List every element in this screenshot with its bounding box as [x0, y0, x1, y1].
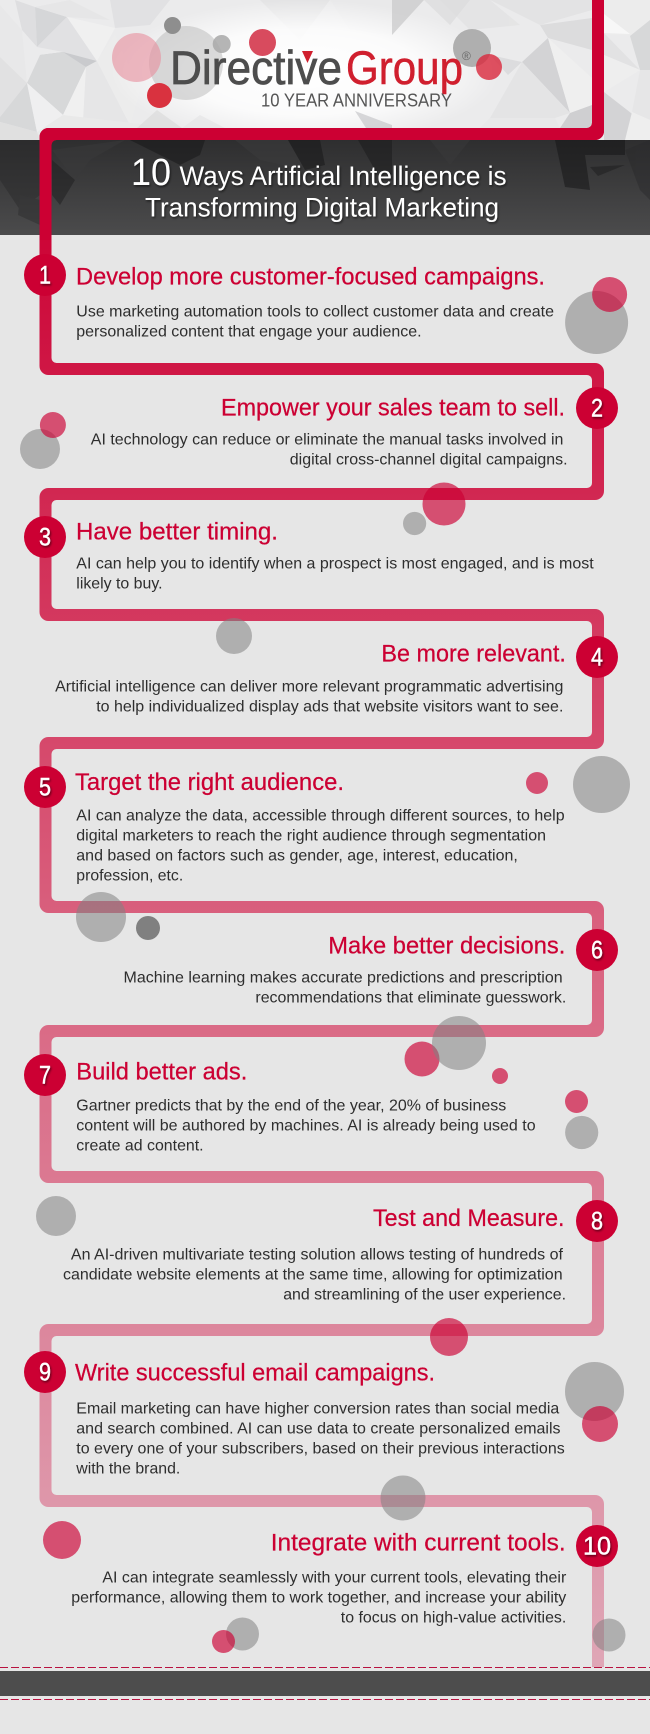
badge 7 — [24, 1054, 66, 1096]
main title: Transforming Digital Marketing — [145, 193, 499, 223]
badge 1 — [24, 254, 66, 296]
heading 1: Develop more customer-focused campaigns. — [76, 263, 545, 290]
heading 8: Test and Measure. — [373, 1205, 564, 1232]
body 6: Machine learning makes accurate predictions and prescription — [124, 970, 563, 987]
logo wordmark — [170, 41, 471, 94]
body 5: profession, etc. — [76, 868, 183, 885]
step 9 — [24, 1351, 565, 1478]
logo wordmark: Group — [346, 41, 463, 94]
body 7: content will be authored by machines. AI is already being used to — [76, 1118, 536, 1135]
body 8 — [63, 1247, 566, 1304]
logo wordmark: Directive — [170, 41, 342, 94]
step 10 — [71, 1525, 618, 1627]
body 9: Email marketing can have higher conversion rates than social media — [76, 1401, 559, 1418]
body 10: performance, allowing them to work together, and increase your ability — [71, 1590, 566, 1607]
badge 5 — [24, 766, 66, 808]
body 1: Use marketing automation tools to collect customer data and create — [76, 304, 554, 321]
body 8: candidate website elements at the same time, allowing for optimization — [63, 1267, 563, 1284]
body 10 — [71, 1570, 567, 1627]
badge 3 — [24, 516, 66, 558]
body 6: recommendations that eliminate guesswork. — [255, 990, 566, 1007]
step 7 — [24, 1054, 536, 1155]
body 3: likely to buy. — [76, 576, 162, 593]
heading 10: Integrate with current tools. — [271, 1530, 566, 1557]
step 5 — [24, 766, 565, 885]
body 5: and based on factors such as gender, age, interest, education, — [76, 848, 518, 865]
badge 5: 5 — [39, 774, 51, 802]
body 10: AI can integrate seamlessly with your current tools, elevating their — [102, 1570, 567, 1587]
badge 3: 3 — [39, 524, 51, 552]
logo wordmark: ® — [462, 49, 471, 63]
body 9 — [75, 1401, 565, 1478]
body 6 — [124, 970, 566, 1007]
badge 2 — [576, 387, 618, 429]
body 7: Gartner predicts that by the end of the year, 20% of business — [76, 1098, 506, 1115]
main title: Ways Artificial Intelligence is — [180, 161, 506, 191]
badge 4: 4 — [591, 644, 603, 672]
body 9: and search combined. AI can use data to create personalized emails — [76, 1421, 561, 1438]
header: low-poly light background — [0, 0, 650, 144]
step 3 — [24, 516, 594, 593]
body 10: to focus on high-value activities. — [341, 1610, 566, 1627]
body 5: digital marketers to reach the right audience through segmentation — [76, 828, 546, 845]
badge 8 — [576, 1200, 618, 1242]
body 5 — [76, 808, 565, 885]
body 3 — [76, 556, 594, 593]
badge 10: 10 — [583, 1532, 611, 1560]
body 4: Artificial intelligence can deliver more relevant programmatic advertising — [55, 679, 563, 696]
badge 8: 8 — [591, 1208, 603, 1236]
heading 7: Build better ads. — [76, 1058, 247, 1085]
body 3: AI can help you to identify when a prospect is most engaged, and is most — [76, 556, 594, 573]
logo tagline: 10 YEAR ANNIVERSARY — [261, 91, 452, 111]
logo circles — [112, 17, 502, 108]
body 4: to help individualized display ads that website visitors want to see. — [96, 699, 563, 716]
header: dark title band — [0, 140, 650, 235]
logo — [112, 17, 502, 111]
body 7: create ad content. — [76, 1138, 204, 1155]
step 6 — [124, 929, 618, 1007]
body 4 — [55, 679, 563, 716]
badge 2: 2 — [591, 394, 603, 422]
heading 4: Be more relevant. — [381, 641, 566, 668]
badge 4 — [576, 636, 618, 678]
body 9: with the brand. — [75, 1461, 180, 1478]
step 8 — [63, 1200, 618, 1304]
step 1 — [24, 254, 554, 341]
main title: 10 — [131, 152, 171, 194]
badge 10 — [576, 1525, 618, 1567]
heading 6: Make better decisions. — [328, 933, 565, 960]
heading 2: Empower your sales team to sell. — [221, 395, 565, 422]
heading 3: Have better timing. — [76, 518, 278, 545]
step 2 — [91, 387, 618, 469]
step 4 — [55, 636, 618, 716]
body 5: AI can analyze the data, accessible through different sources, to help — [76, 808, 565, 825]
body 2: digital cross-channel digital campaigns. — [290, 452, 568, 469]
heading 5: Target the right audience. — [75, 769, 344, 796]
body 7 — [76, 1098, 536, 1155]
badge 9: 9 — [39, 1358, 51, 1386]
body 2 — [91, 432, 568, 469]
main title — [131, 152, 506, 223]
badge 7: 7 — [39, 1062, 51, 1090]
heading 9: Write successful email campaigns. — [75, 1360, 435, 1387]
body 1 — [76, 304, 554, 341]
body 2: AI technology can reduce or eliminate the manual tasks involved in — [91, 432, 563, 449]
body 8: An AI-driven multivariate testing solution allows testing of hundreds of — [71, 1247, 564, 1264]
badge 1: 1 — [39, 262, 51, 290]
badge 6 — [576, 929, 618, 971]
footer band — [0, 1668, 650, 1700]
badge 6: 6 — [591, 936, 603, 964]
body 8: and streamlining of the user experience. — [283, 1287, 566, 1304]
body 1: personalized content that engage your audience. — [76, 324, 422, 341]
decorative bubbles — [20, 277, 630, 1653]
badge 9 — [24, 1351, 66, 1393]
body 9: to every one of your subscribers, based on their previous interactions — [76, 1441, 565, 1458]
